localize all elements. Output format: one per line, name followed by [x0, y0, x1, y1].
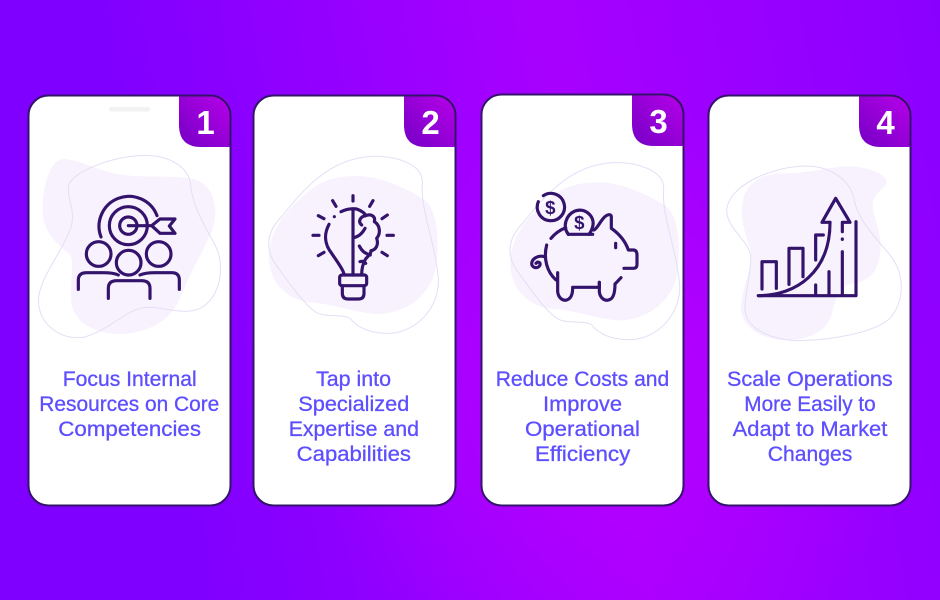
illustration: team and target: [38, 155, 221, 338]
icon: target and people: [78, 196, 179, 298]
card 1 text: Focus Internal: [63, 367, 197, 391]
illustration: piggy bank: $: [545, 197, 556, 218]
card 4 body: [708, 96, 910, 506]
illustration: growth chart: [727, 166, 901, 341]
card 3 text: Reduce Costs and: [496, 367, 669, 391]
panel: card 3: [482, 94, 684, 506]
number badge 3: [632, 94, 684, 146]
card 3 text: Efficiency: [535, 442, 631, 466]
card 2 body: [254, 96, 456, 506]
panel: card 4: [708, 95, 911, 506]
card 2 text: [289, 367, 419, 466]
number badge 4: 4: [876, 104, 895, 141]
panel: card 1: [28, 95, 231, 506]
number badge 2: 2: [421, 104, 440, 141]
card 4 text: [727, 367, 893, 466]
card 1 text: Resources on Core: [39, 392, 219, 416]
speaker notch: [109, 107, 150, 112]
card 2 text: Specialized: [298, 392, 409, 416]
illustration: light bulb brain: [269, 156, 438, 333]
icon: bulb: [313, 196, 393, 299]
card 4 text: More Easily to: [744, 392, 876, 416]
card 3 text: [496, 367, 669, 466]
number badge 1: [179, 95, 231, 147]
card 2 text: Capabilities: [297, 442, 411, 466]
card 1 text: [39, 367, 219, 441]
card 4 text: Scale Operations: [727, 367, 893, 391]
icon: bars and rising arrow: [758, 198, 856, 296]
card 4 text: Adapt to Market: [733, 417, 887, 441]
panel: card 2: [254, 95, 456, 506]
card 1 body: [28, 96, 230, 506]
card 2 text: Expertise and: [289, 417, 419, 441]
illustration: piggy bank: $: [574, 212, 585, 233]
icon: piggy bank with coins: [532, 193, 637, 300]
illustration: piggy bank: [510, 163, 680, 340]
card 3 body: [482, 94, 684, 506]
number badge 1: 1: [196, 104, 215, 141]
number badge 4: [859, 95, 911, 147]
card 4 text: Changes: [768, 442, 852, 466]
card 3 text: Operational: [525, 417, 640, 441]
card 1 text: Competencies: [58, 417, 201, 441]
card 2 text: Tap into: [316, 367, 391, 391]
card 3 text: Improve: [543, 392, 622, 416]
number badge 3: 3: [649, 103, 668, 140]
number badge 2: [404, 95, 456, 147]
